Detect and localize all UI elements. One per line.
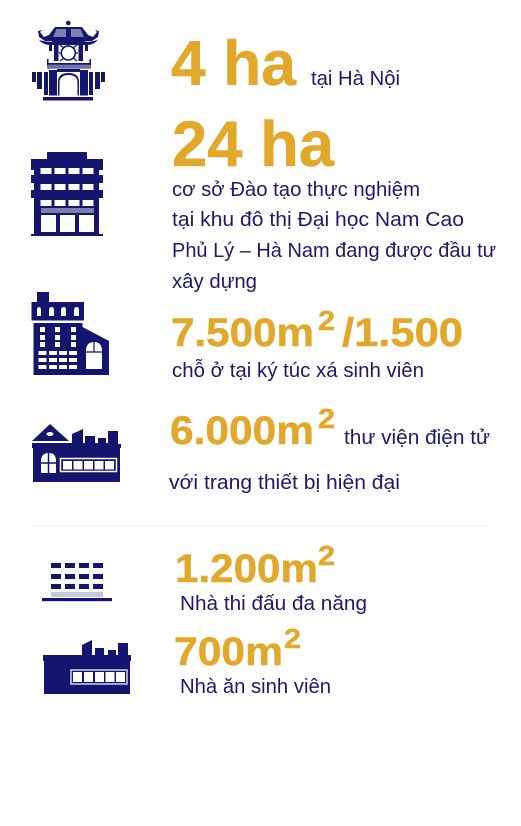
stat: 1.200m2: 1.200m: [175, 547, 318, 591]
stat: 7.500m2/1.500: 7.500m: [171, 311, 314, 355]
stat: 7.500m2/1.500: 2: [318, 305, 335, 336]
stat: 7.500m2/1.500: /1.500: [342, 311, 463, 355]
stat: 1.200m2: 2: [318, 540, 335, 571]
icon: canteen building: [43, 640, 131, 694]
stat: 6.000m2: 2: [318, 403, 335, 434]
text block: 24 ha description: cơ sở Đào tạo thực nghiệm: [172, 179, 420, 201]
icon: library building: [32, 424, 121, 482]
stat: 6.000m2: 6.000m: [170, 409, 314, 453]
icon: Temple of Literature gate: [32, 21, 105, 101]
icon: sports hall: [42, 563, 112, 601]
text block: 24 ha description: [172, 179, 496, 293]
label: tại Hà Nội: tại Hà Nội: [311, 68, 400, 90]
label: dormitory: chỗ ở tại ký túc xá sinh viên: [172, 359, 424, 382]
text block: 24 ha description: Phủ Lý – Hà Nam đang được đầu tư: [172, 240, 496, 262]
label: e-library: thư viện điện tử: [344, 427, 490, 449]
text block: 24 ha description: xây dựng: [172, 271, 257, 293]
stat: 7.500m2/1.500: [171, 305, 463, 355]
icon: dormitory building: [32, 292, 109, 375]
icon: tall building: [31, 152, 103, 236]
label: canteen: Nhà ăn sinh viên: [180, 676, 331, 698]
label: modern equipment: với trang thiết bị hiện đại: [169, 472, 400, 494]
text block: 24 ha description: tại khu đô thị Đại học Nam Cao: [172, 209, 464, 231]
stat: 700m2: 700m: [174, 630, 283, 674]
stat: 4 ha: 4 ha: [171, 29, 297, 99]
stat: 24 ha: 24 ha: [172, 108, 334, 180]
stat: 700m2: [174, 623, 301, 674]
stat: 700m2: 2: [284, 623, 301, 654]
label: sports hall: Nhà thi đấu đa năng: [180, 593, 367, 615]
